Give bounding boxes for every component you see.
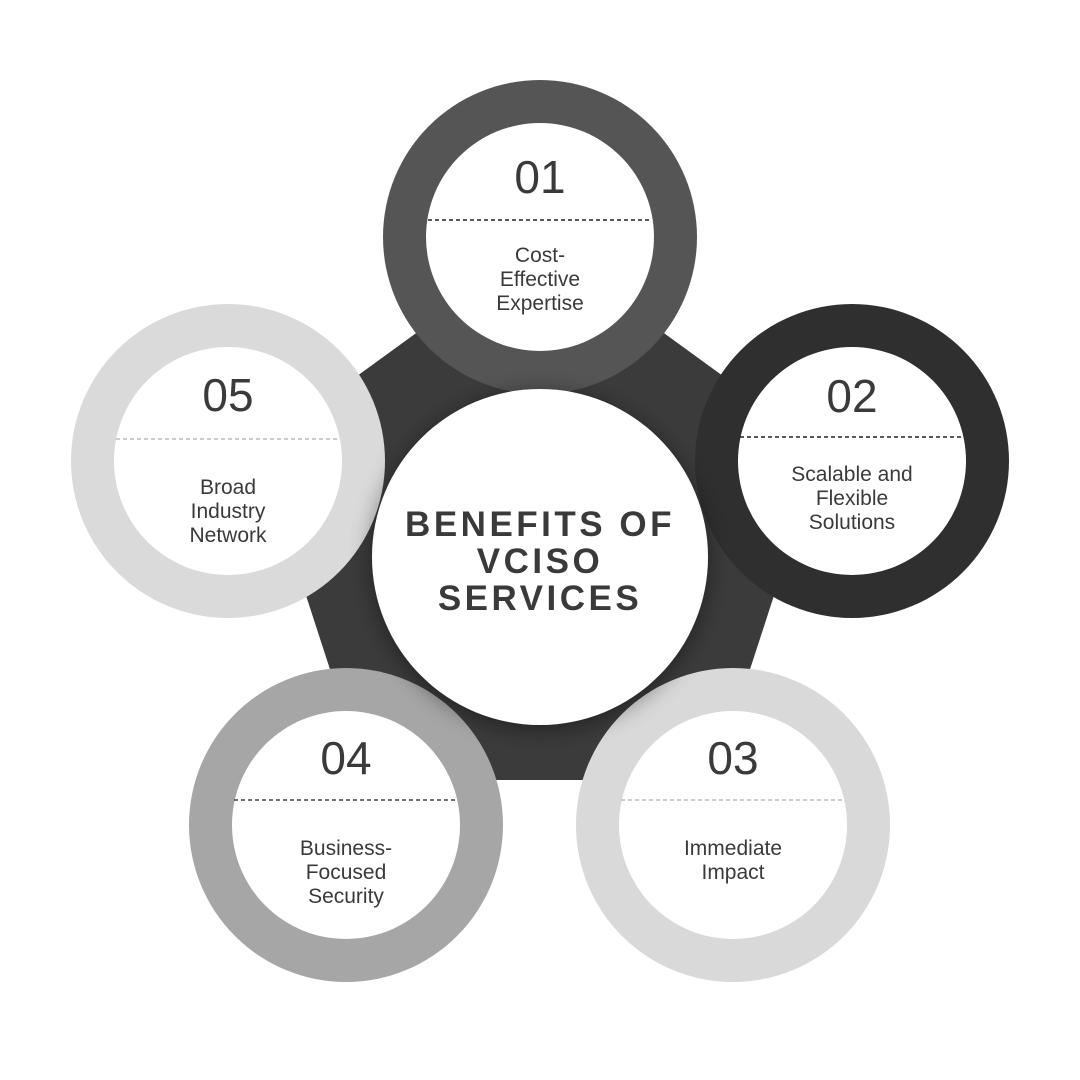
ring 03: 03 [707,732,759,784]
pentagon background [258,243,822,780]
ring 01: Cost- [515,244,565,267]
ring 05: 05 [202,369,254,421]
central circle with title: VCISO [477,542,603,581]
ring 02 [695,304,1009,618]
ring 04: Security [308,885,384,908]
central circle with title: SERVICES [438,579,642,618]
ring 03 [576,668,890,982]
ring 03: Immediate [684,837,782,860]
ring 02: 02 [826,370,878,422]
ring 04 [189,668,503,982]
ring 04: Business- [300,837,392,860]
central circle with title: BENEFITS OF [405,505,675,544]
ring 05: Broad [200,476,256,499]
ring 05: Industry [191,500,266,523]
ring 04: 04 [320,732,372,784]
ring 01: 01 [514,151,566,203]
ring 01: Effective [500,268,580,291]
ring 05: Network [189,524,267,547]
ring 02: Flexible [816,487,888,510]
ring 02: Solutions [809,511,895,534]
ring 02: Scalable and [791,463,913,486]
ring 05 [71,304,385,618]
ring 01 [383,80,697,394]
ring 01: Expertise [496,292,584,315]
central circle with title [372,389,708,725]
ring 03: Impact [701,861,765,884]
ring 04: Focused [306,861,386,884]
